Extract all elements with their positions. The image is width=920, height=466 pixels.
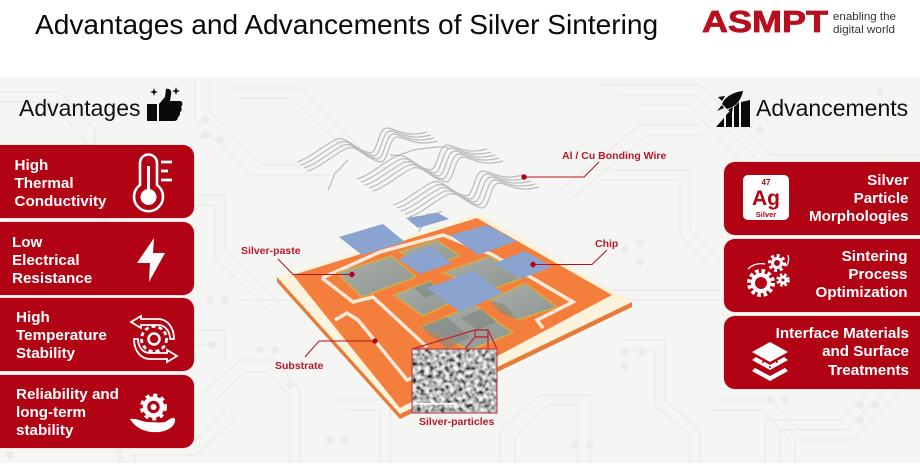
chart: exploded silver sintering module diagram xyxy=(241,127,666,428)
card: High Temperature Stability xyxy=(0,298,194,371)
icon: hand holding gear xyxy=(130,394,176,432)
inset: SEM micrograph of silver particles xyxy=(412,330,497,413)
callout: Substrate xyxy=(275,338,378,372)
card: Sintering Process Optimization: Sintering xyxy=(842,248,908,264)
card: Sintering Process Optimization: Optimization xyxy=(816,284,908,301)
heading: Advantages: Advantages xyxy=(19,95,140,121)
group: bonding wires xyxy=(297,128,539,238)
group: silver paste and die pads xyxy=(337,240,557,350)
callout: Chip xyxy=(530,238,618,267)
card: Sintering Process Optimization xyxy=(724,239,920,312)
icon: rocket and rising bars xyxy=(716,91,750,127)
card: Low Electrical Resistance: Electrical xyxy=(12,252,80,269)
icon: thermometer xyxy=(132,153,172,212)
callout: Silver-paste xyxy=(241,245,355,277)
card: Interface Materials and Surface Treatments xyxy=(724,316,920,389)
card: Silver Particle Morphologies: Silver xyxy=(867,172,908,188)
icon: thumbs up xyxy=(147,87,182,121)
icon: Ag element tile: 47 xyxy=(762,178,771,187)
icon: Ag element tile xyxy=(743,175,789,220)
icon: Ag element tile: Silver xyxy=(756,210,776,219)
callout: Silver-paste: Silver-paste xyxy=(241,245,301,257)
icon: gear with cycle arrows xyxy=(129,314,179,364)
icon: stacked layers xyxy=(752,342,788,381)
card: Reliability and long-term stability: long-term xyxy=(16,404,86,421)
group: darker die pad shading xyxy=(414,281,517,349)
card: High Temperature Stability: High xyxy=(16,308,50,326)
card: Silver Particle Morphologies: Morphologies xyxy=(809,208,908,225)
logo: ASMPT enabling the digital world xyxy=(702,6,896,38)
card: High Temperature Stability: Temperature xyxy=(16,327,107,344)
card: Interface Materials and Surface Treatments: and Surface xyxy=(822,343,909,360)
logo: ASMPT enabling the digital world: enabling the xyxy=(833,11,896,23)
card: Low Electrical Resistance xyxy=(0,222,194,295)
card: High Thermal Conductivity: Thermal xyxy=(14,175,74,192)
card: Silver Particle Morphologies: Particle xyxy=(854,190,908,207)
group: chips xyxy=(339,213,552,312)
group: substrate xyxy=(277,213,632,419)
card: High Thermal Conductivity xyxy=(0,145,194,218)
label: Silver-particles: Silver-particles xyxy=(419,416,494,428)
card: High Thermal Conductivity: Conductivity xyxy=(14,193,106,210)
callout: Substrate: Substrate xyxy=(275,360,324,372)
callout: Al / Cu Bonding Wire: Al / Cu Bonding Wire xyxy=(562,150,666,162)
card: Interface Materials and Surface Treatments: Treatments xyxy=(828,362,909,379)
icon: gears with arrows xyxy=(747,254,790,297)
callout: Al / Cu Bonding Wire xyxy=(521,150,666,180)
white traces on substrate xyxy=(322,235,573,380)
heading: Advancements: Advancements xyxy=(756,95,908,121)
card: Low Electrical Resistance: Resistance xyxy=(12,270,92,287)
callout: Chip: Chip xyxy=(595,238,618,250)
title: Advantages and Advancements of Silver Sintering xyxy=(35,9,658,40)
card: Reliability and long-term stability: Reliability and xyxy=(16,386,119,402)
icon: lightning bolt xyxy=(137,238,165,282)
card: Reliability and long-term stability: stability xyxy=(16,422,73,439)
logo: ASMPT enabling the digital world: digital world xyxy=(833,24,895,36)
card: Silver Particle Morphologies xyxy=(724,162,920,235)
card: Sintering Process Optimization: Process xyxy=(848,266,908,283)
card: High Thermal Conductivity: High xyxy=(14,156,48,174)
card: High Temperature Stability: Stability xyxy=(16,345,75,362)
card: Interface Materials and Surface Treatments: Interface Materials xyxy=(776,325,909,342)
icon: Ag element tile: Ag xyxy=(752,187,780,210)
card: Reliability and long-term stability xyxy=(0,375,194,448)
card: Low Electrical Resistance: Low xyxy=(12,234,42,250)
